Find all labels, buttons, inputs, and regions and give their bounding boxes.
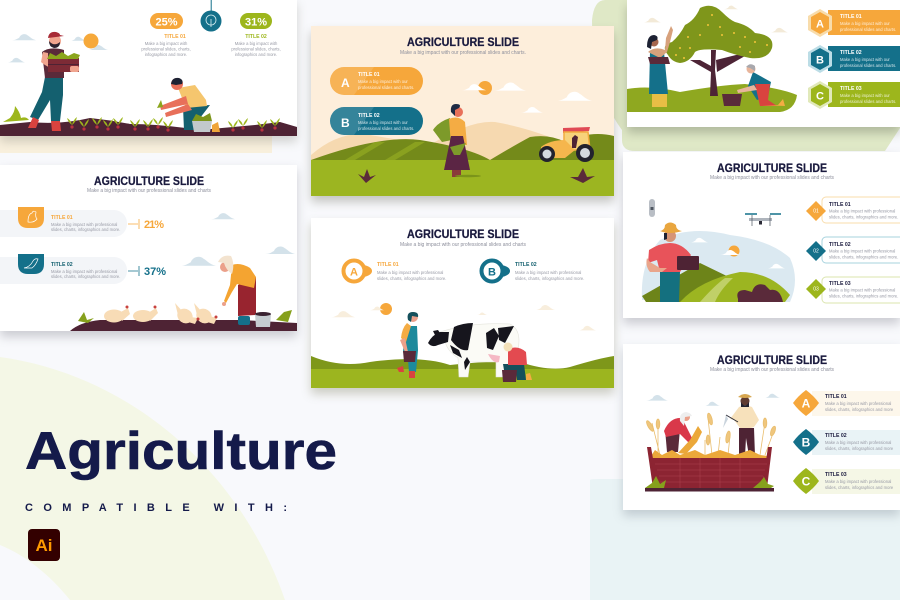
option B ring: TITLE 02: [515, 262, 537, 268]
bar B: professional slides and charts.: [840, 63, 896, 68]
heading: Make a big impact with our professional slides and charts: [87, 188, 211, 194]
heading: [400, 37, 526, 56]
man with sickle: [723, 394, 759, 456]
option B ring: Make a big impact with professional: [515, 270, 581, 275]
row A: Make a big impact with professional: [825, 401, 891, 406]
man with basket: [722, 64, 785, 106]
option A pill: A: [341, 76, 350, 90]
option B pill: B: [341, 116, 350, 130]
heading: AGRICULTURE SLIDE: [94, 176, 204, 188]
percentage 25: Make a big impact with: [145, 41, 188, 46]
bar B: [808, 45, 900, 73]
option B pill: professional slides and charts.: [358, 126, 414, 131]
woman feeding chickens: [218, 256, 271, 327]
heading: [710, 355, 834, 373]
option A pill: Make a big impact with our: [358, 79, 408, 84]
item 02: TITLE 02: [829, 242, 851, 248]
panel: slide tree: [627, 0, 900, 133]
controller: [649, 199, 655, 217]
row B: Make a big impact with professional: [825, 440, 891, 445]
row B: TITLE 02: [825, 433, 847, 439]
percentage 25: professional slides, charts,: [141, 46, 191, 52]
item 02: slides, charts, infographics and more.: [829, 254, 898, 260]
row 37%: TITLE 02: [51, 262, 73, 268]
chickens: [104, 303, 218, 326]
farmer with tablet: [646, 222, 699, 302]
soil with seedlings: [0, 106, 297, 136]
percentage 25: 25%: [155, 16, 178, 28]
clouds: [180, 213, 295, 266]
panel: slide wheat: [623, 344, 900, 516]
percentage 31: [231, 13, 281, 57]
percentage 31: professional slides, charts,: [231, 46, 281, 52]
item 01: slides, charts, infographics and more.: [829, 214, 898, 220]
bar A: TITLE 01: [840, 14, 862, 20]
option A pill: TITLE 01: [358, 72, 380, 78]
row 21%: TITLE 01: [51, 215, 73, 221]
row 21%: 21%: [144, 219, 164, 231]
bar A: A: [816, 18, 824, 30]
icon: tree circle: [200, 0, 222, 32]
panel: slide top left: [0, 0, 297, 142]
row A: slides, charts, infographics and more: [825, 407, 894, 412]
sun and clouds: [462, 81, 592, 113]
row C: [793, 468, 900, 494]
bar C: [808, 81, 900, 109]
row 37%: Make a big impact with professional: [51, 269, 117, 274]
item 01: 01: [813, 208, 819, 214]
heading: AGRICULTURE SLIDE: [407, 37, 519, 49]
heading: [87, 176, 211, 194]
woman with crop: [433, 104, 481, 177]
grass field: [311, 160, 614, 196]
item 01: TITLE 01: [829, 202, 851, 208]
percentage 31: 31%: [245, 16, 267, 28]
hills: [311, 356, 614, 372]
row 37%: [0, 254, 166, 284]
option A pill: [330, 67, 423, 95]
row 21%: [0, 207, 164, 237]
item 01: [806, 197, 900, 223]
option A ring: Make a big impact with professional: [377, 270, 443, 275]
option B pill: [330, 107, 423, 135]
item 03: 03: [813, 286, 819, 292]
row C: TITLE 03: [825, 472, 847, 478]
heading: AGRICULTURE SLIDE: [717, 163, 827, 175]
heading: Make a big impact with our professional slides and charts: [710, 175, 834, 181]
cow: [428, 323, 519, 377]
item 02: Make a big impact with professional: [829, 248, 895, 254]
percentage 25: infographics and more.: [145, 52, 187, 57]
panel: slide cow: [311, 218, 614, 394]
item 02: [806, 237, 900, 263]
panel: slide drone: [623, 152, 900, 324]
heading: [400, 229, 526, 248]
panel: slide tractor: [311, 26, 614, 202]
percentage 25: TITLE 01: [164, 34, 186, 40]
bar A: [808, 9, 900, 37]
field: [311, 369, 614, 388]
option A pill: professional slides and charts.: [358, 85, 414, 90]
option A ring: slides, charts, infographics and more.: [377, 276, 446, 281]
item 02: 02: [813, 248, 819, 254]
row C: Make a big impact with professional: [825, 479, 891, 484]
row 37%: slides, charts, infographics and more.: [51, 274, 120, 279]
row A: [793, 390, 900, 416]
ground: [627, 84, 797, 112]
icon: Adobe Illustrator: Ai: [36, 536, 52, 555]
hills: [311, 122, 614, 170]
option A ring: A: [350, 266, 358, 278]
sun and clouds: [331, 303, 596, 330]
main title: Agriculture: [25, 422, 337, 481]
option B ring: B: [488, 266, 496, 278]
percentage 25: [141, 13, 191, 57]
woman picking fruit: [647, 26, 673, 107]
row B: B: [802, 436, 811, 450]
soil: [70, 320, 297, 331]
bar C: professional slides and charts.: [840, 99, 896, 104]
row A: TITLE 01: [825, 394, 847, 400]
option B ring: [482, 260, 584, 282]
row C: C: [802, 474, 811, 488]
option A ring: [344, 260, 446, 282]
bar C: TITLE 03: [840, 86, 862, 92]
heading: Make a big impact with our professional slides and charts.: [400, 50, 526, 56]
woman harvesting: [664, 412, 702, 454]
woman with bucket: [397, 312, 418, 378]
row 21%: slides, charts, infographics and more.: [51, 227, 120, 232]
item 03: [806, 277, 900, 303]
bar A: professional slides and charts.: [840, 27, 896, 32]
tractor: [539, 127, 594, 162]
row A: A: [802, 396, 811, 410]
illustration backdrop: [642, 231, 795, 302]
basket of wheat: [645, 447, 774, 492]
icon: Adobe Illustrator: [28, 529, 60, 561]
option B pill: Make a big impact with our: [358, 120, 408, 125]
bar B: TITLE 02: [840, 50, 862, 56]
clouds: [646, 394, 780, 406]
sun and clouds: [690, 238, 785, 268]
bar B: Make a big impact with our: [840, 57, 890, 62]
subtitle: compatible with: COMPATIBLE WITH:: [25, 502, 287, 514]
row B: [793, 429, 900, 455]
row B: slides, charts, infographics and more: [825, 446, 894, 451]
row C: slides, charts, infographics and more: [825, 485, 894, 490]
option B pill: TITLE 02: [358, 113, 380, 119]
bar A: Make a big impact with our: [840, 21, 890, 26]
clouds: [643, 6, 788, 32]
heading: Make a big impact with our professional slides and charts: [400, 242, 526, 248]
wheat stalks: [645, 413, 777, 455]
tree: [665, 6, 772, 96]
person milking: [502, 342, 532, 382]
crouching farmer with basket: [157, 78, 220, 132]
row 37%: 37%: [144, 266, 166, 278]
option B ring: slides, charts, infographics and more.: [515, 276, 584, 281]
farmer carrying crate: [28, 32, 80, 131]
plants: [78, 310, 292, 323]
panel: slide chickens: [0, 165, 297, 337]
item 01: Make a big impact with professional: [829, 208, 895, 214]
item 03: TITLE 03: [829, 281, 851, 287]
heading: AGRICULTURE SLIDE: [407, 229, 519, 241]
heading: Make a big impact with our professional slides and charts: [710, 367, 834, 373]
heading: AGRICULTURE SLIDE: [717, 355, 827, 367]
option A ring: TITLE 01: [377, 262, 399, 268]
item 03: slides, charts, infographics and more.: [829, 294, 898, 298]
clouds and sun: [7, 34, 108, 62]
percentage 31: TITLE 02: [245, 34, 267, 40]
bar C: C: [816, 90, 824, 102]
percentage 31: Make a big impact with: [235, 41, 278, 46]
percentage 31: infographics and more.: [235, 52, 277, 57]
heading: [710, 163, 834, 181]
item 03: Make a big impact with professional: [829, 288, 895, 292]
plant tufts: [358, 168, 595, 183]
row 21%: Make a big impact with professional: [51, 222, 117, 227]
bar B: B: [816, 54, 824, 66]
bar C: Make a big impact with our: [840, 93, 890, 98]
drone: [745, 214, 781, 226]
